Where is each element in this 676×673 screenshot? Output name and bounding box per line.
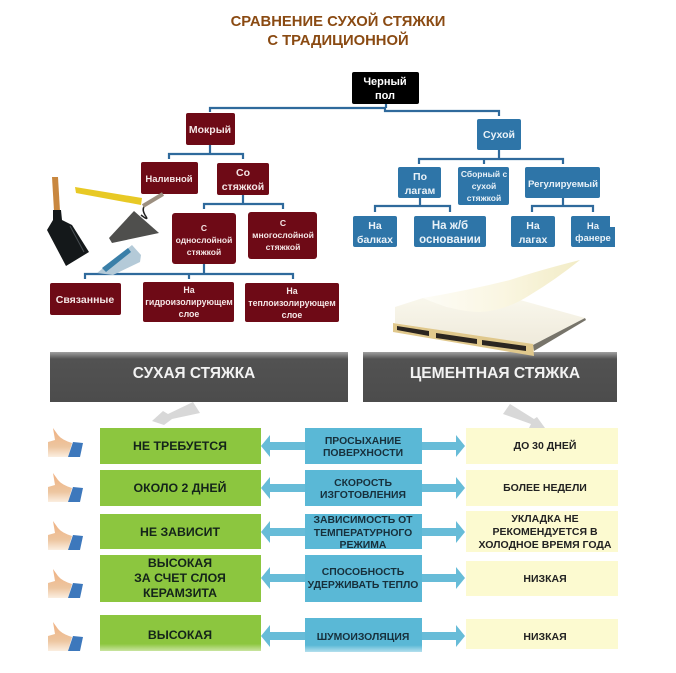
node: На гидроизолирующем слое: На (183, 285, 195, 295)
icon: metal profile (97, 245, 141, 275)
cell: property (305, 618, 422, 652)
node: Наливной: Наливной (145, 174, 193, 185)
arrow: right grey (503, 404, 545, 428)
cell: cement value: РЕКОМЕНДУЕТСЯ В (492, 526, 598, 538)
node: Сухой (477, 119, 521, 150)
node: Связанные: Связанные (56, 294, 114, 306)
node: На ж/б основании: основании (419, 234, 481, 246)
cell: property: РЕЖИМА (340, 540, 387, 551)
header: dry screed: СУХАЯ СТЯЖКА (133, 365, 255, 382)
title (231, 12, 445, 49)
cell: dry value: НЕ ТРЕБУЕТСЯ (133, 439, 227, 453)
node: Сборный с сухой стяжкой: Сборный с (461, 169, 507, 179)
node: С многослойной стяжкой: стяжкой (266, 242, 300, 252)
cell: cement value: НИЗКАЯ (523, 573, 567, 585)
tree connectors (85, 104, 593, 279)
cell: property: ТЕМПЕРАТУРНОГО (314, 528, 412, 539)
cell: dry value (100, 615, 261, 651)
node: root: пол (375, 90, 395, 102)
node: Сухой: Сухой (483, 129, 515, 141)
node: На гидроизолирующем слое: слое (179, 309, 199, 319)
node: На балках (353, 216, 397, 247)
cell: property (305, 470, 422, 506)
node: Наливной (141, 162, 198, 194)
arrow: double (261, 435, 465, 457)
node: Регулируемый (525, 167, 600, 198)
cell: dry value (100, 514, 261, 549)
cell: cement value (466, 561, 618, 596)
cell: cement value: ХОЛОДНОЕ ВРЕМЯ ГОДА (479, 539, 612, 551)
cell: dry value: ОКОЛО 2 ДНЕЙ (134, 480, 227, 495)
node: На теплоизолирующем слое: На (286, 286, 298, 296)
node: На балках: На (368, 220, 382, 232)
cell: cement value (466, 511, 618, 552)
node: С однослойной стяжкой: однослойной (176, 235, 232, 245)
node: На ж/б основании: На ж/б (432, 220, 468, 232)
node: Мокрый: Мокрый (189, 124, 231, 136)
cell: property (305, 555, 422, 602)
icon: trowel (109, 194, 163, 243)
icon: thumb up (48, 569, 83, 598)
cell: property: СКОРОСТЬ (334, 478, 392, 489)
cell: dry value (100, 428, 261, 464)
cell: property (305, 514, 422, 551)
arrow: double (261, 521, 465, 543)
icon: level (75, 187, 142, 205)
node: По лагам (398, 167, 441, 198)
node: На фанере: На (587, 221, 600, 232)
icon: thumb up (48, 622, 83, 651)
node: На фанере: фанере (575, 233, 611, 244)
cell: dry value: ЗА СЧЕТ СЛОЯ (134, 571, 226, 585)
node: На теплоизолирующем слое: слое (282, 310, 302, 320)
node: На гидроизолирующем слое (143, 282, 234, 322)
node: Связанные (50, 283, 121, 315)
header: cement screed (363, 352, 617, 402)
cell: property: ИЗГОТОВЛЕНИЯ (320, 490, 406, 501)
cell: property: СПОСОБНОСТЬ (322, 567, 405, 578)
cell: property: УДЕРЖИВАТЬ ТЕПЛО (308, 580, 418, 591)
branch: dry screed (353, 119, 615, 247)
row 4 (48, 555, 618, 602)
node: На гидроизолирующем слое: гидроизолирующем (145, 297, 233, 307)
arrow: left grey (152, 402, 200, 425)
arrow: double (261, 477, 465, 499)
row 2 (48, 470, 618, 506)
node: По лагам: По (413, 171, 427, 183)
cell: cement value (466, 619, 618, 649)
node: Сборный с сухой стяжкой (458, 167, 509, 205)
node: На теплоизолирующем слое: теплоизолирующем (248, 298, 336, 308)
cell: dry value (100, 470, 261, 506)
icon: thumb up (48, 428, 83, 457)
cell: cement value: УКЛАДКА НЕ (511, 513, 579, 525)
header: dry screed (50, 352, 348, 402)
cell: dry value: ВЫСОКАЯ (148, 628, 212, 642)
node: С многослойной стяжкой: многослойной (252, 230, 314, 240)
node: На лагах: лагах (519, 234, 547, 246)
cell: dry value: НЕ ЗАВИСИТ (140, 525, 220, 539)
node: На ж/б основании (414, 216, 486, 247)
row 1 (48, 428, 618, 464)
branch: wet screed (50, 113, 339, 322)
row 3 (48, 511, 618, 552)
cell: cement value: НИЗКАЯ (523, 631, 567, 643)
cell: property: ШУМОИЗОЛЯЦИЯ (317, 632, 409, 643)
title: СРАВНЕНИЕ СУХОЙ СТЯЖКИ (231, 12, 445, 30)
node: По лагам: лагам (405, 185, 435, 197)
node: На фанере (571, 216, 615, 247)
cell: property: ПРОСЫХАНИЕ (325, 436, 401, 447)
node: На балках: балках (357, 234, 393, 246)
node: С многослойной стяжкой: С (280, 218, 286, 228)
cell: property: ПОВЕРХНОСТИ (323, 448, 403, 459)
cell: cement value: ДО 30 ДНЕЙ (514, 439, 576, 452)
node: На лагах: На (526, 220, 540, 232)
title: С ТРАДИЦИОННОЙ (267, 31, 409, 49)
row 5 (48, 615, 618, 652)
node: Со стяжкой: стяжкой (222, 181, 264, 193)
cell: property: ЗАВИСИМОСТЬ ОТ (313, 515, 413, 526)
node: Регулируемый: Регулируемый (528, 179, 598, 190)
node: root: Черный (363, 76, 407, 88)
cell: dry value: КЕРАМЗИТА (143, 586, 217, 600)
icon: thumb up (48, 473, 83, 502)
node: root (352, 72, 419, 104)
node: Мокрый (186, 113, 235, 145)
node: Со стяжкой: Со (236, 167, 250, 179)
node: На лагах (511, 216, 555, 247)
cell: cement value: БОЛЕЕ НЕДЕЛИ (503, 482, 587, 494)
header: cement screed: ЦЕМЕНТНАЯ СТЯЖКА (410, 365, 580, 382)
node: С многослойной стяжкой (248, 212, 317, 259)
node: Сборный с сухой стяжкой: стяжкой (467, 193, 501, 203)
cell: dry value (100, 555, 261, 602)
arrow: double (261, 567, 465, 589)
node: Сборный с сухой стяжкой: сухой (472, 181, 496, 191)
node: С однослойной стяжкой: стяжкой (187, 247, 221, 257)
node: На теплоизолирующем слое (245, 283, 339, 322)
icon: shovel (47, 177, 89, 266)
node: Со стяжкой (217, 163, 269, 195)
node: С однослойной стяжкой (172, 213, 236, 264)
node: С однослойной стяжкой: С (201, 223, 207, 233)
cell: cement value (466, 470, 618, 506)
icon: thumb up (48, 521, 83, 550)
arrow: double (261, 625, 465, 647)
cell: cement value (466, 428, 618, 464)
cell: dry value: ВЫСОКАЯ (148, 556, 212, 570)
illustration: screed sheet on pallet (393, 260, 586, 356)
cell: property (305, 428, 422, 464)
